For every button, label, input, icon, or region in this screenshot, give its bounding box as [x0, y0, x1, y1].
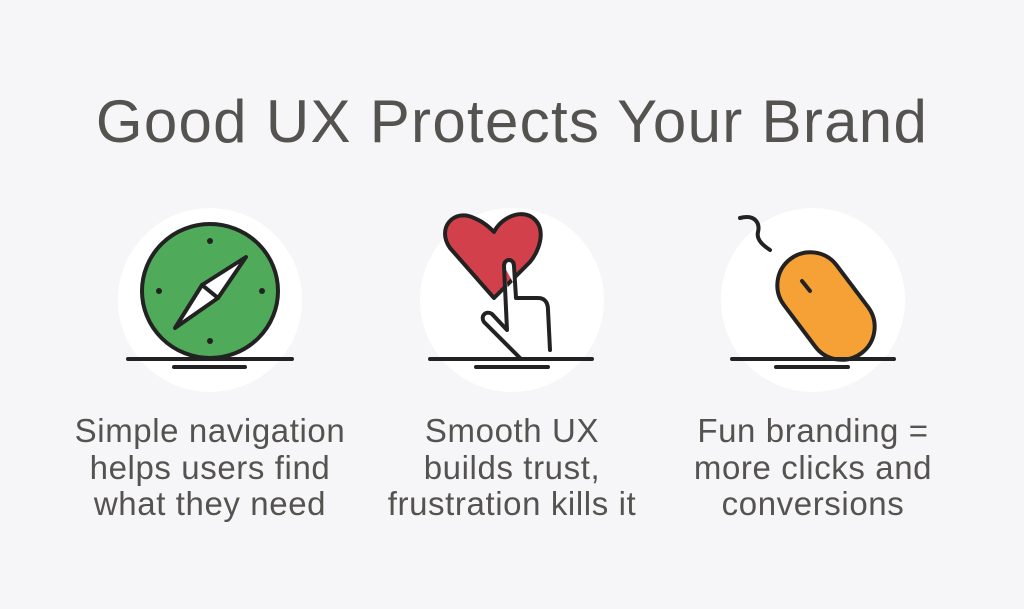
caption: navigation: what they need: [94, 485, 326, 522]
caption: trust: Smooth UX: [425, 412, 599, 449]
caption: branding: Fun branding =: [697, 412, 929, 449]
caption: trust: frustration kills it: [388, 485, 636, 522]
caption: branding: conversions: [722, 485, 904, 522]
caption: navigation: [75, 412, 345, 522]
caption: navigation: helps users find: [90, 448, 330, 486]
icon: compass: [118, 208, 302, 392]
icon: heart and hand: [420, 208, 604, 392]
icon: mouse: [721, 208, 905, 392]
title: Good UX Protects Your Brand: [96, 88, 928, 155]
caption: trust: builds trust,: [424, 448, 600, 486]
caption: navigation: Simple navigation: [75, 412, 345, 449]
caption: branding: more clicks and: [694, 448, 932, 486]
caption: branding: [694, 412, 932, 522]
caption: trust: [388, 412, 636, 522]
